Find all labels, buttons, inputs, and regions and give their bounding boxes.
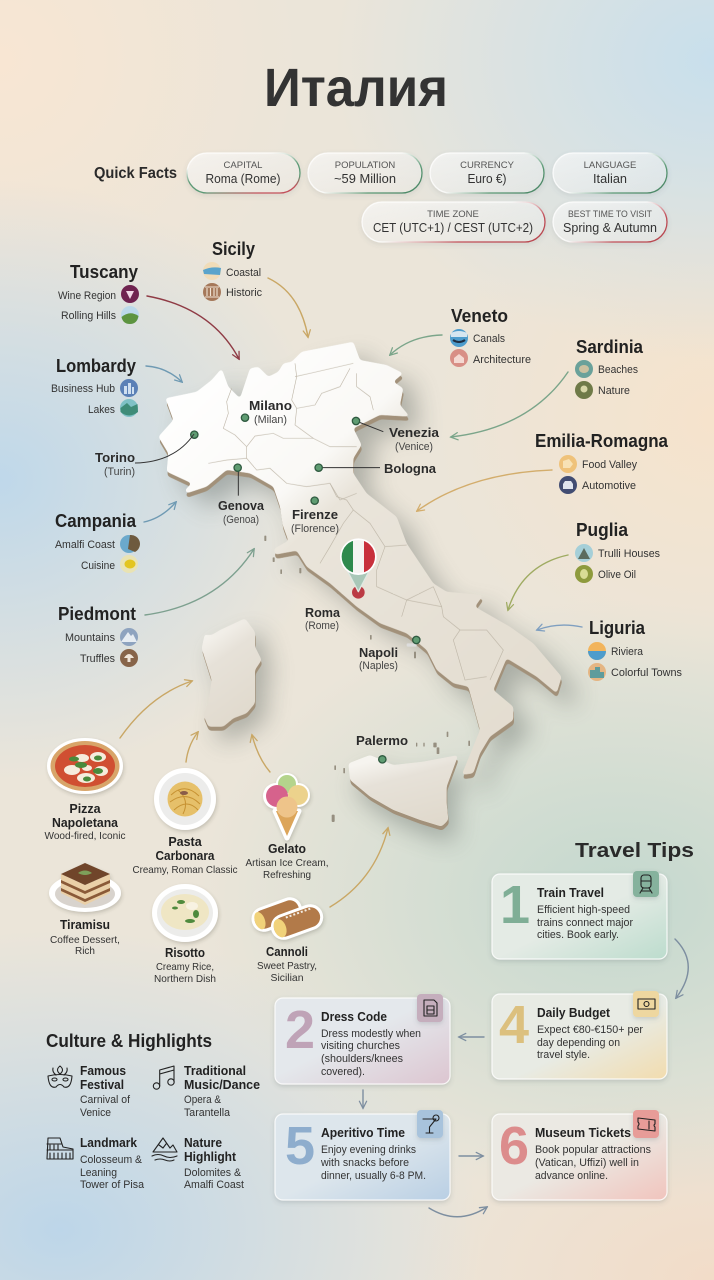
arrow: Veneto — [390, 335, 442, 355]
card: museum tickets: Museum Tickets — [535, 1126, 631, 1140]
item: traditional music — [153, 1064, 260, 1119]
icon: colorful towns — [588, 663, 606, 681]
region: Veneto: Veneto — [451, 306, 508, 326]
region: Campania: Amalfi Coast — [55, 539, 115, 551]
food: cannoli: Sweet Pastry, — [257, 960, 317, 972]
card: museum tickets — [492, 1110, 667, 1200]
region: Sicily: Sicily — [212, 239, 255, 259]
icon: lake — [120, 399, 138, 417]
region: Piedmont: Truffles — [80, 653, 115, 665]
city: Napoli: (Naples) — [359, 660, 398, 672]
item: traditional music: Opera & — [184, 1094, 222, 1106]
city dots — [191, 414, 420, 763]
item: landmark — [47, 1136, 145, 1191]
title: Италия — [264, 58, 448, 118]
region: Veneto — [450, 306, 531, 367]
card: daily budget: Daily Budget — [537, 1006, 611, 1020]
fact: time zone — [362, 202, 545, 242]
item: landmark: Leaning — [80, 1167, 117, 1179]
Sardinia — [202, 618, 262, 731]
region: Lombardy: Lombardy — [56, 356, 136, 376]
city: Roma — [305, 605, 341, 632]
card: aperitivo time: dinner, usually 6-8 PM. — [321, 1170, 426, 1182]
card: train travel: cities. Book early. — [537, 929, 619, 941]
arrow: Puglia — [508, 555, 568, 610]
region: Tuscany: Tuscany — [70, 262, 138, 282]
icon: riviera — [588, 642, 606, 660]
city: Genova: Genova — [218, 498, 265, 513]
city: Venezia: Venezia — [389, 425, 440, 440]
icon: mountains and waves — [152, 1138, 177, 1161]
city: Milano: Milano — [249, 398, 292, 413]
card: dress code: Dress Code — [321, 1010, 387, 1024]
city: Firenze — [291, 507, 339, 535]
quick facts heading: Quick Facts — [94, 165, 177, 182]
fact: language — [553, 153, 667, 193]
region: Puglia: Olive Oil — [598, 569, 636, 581]
region: Emilia-Romagna: Automotive — [582, 480, 636, 492]
Sicily — [348, 755, 459, 831]
region: Emilia-Romagna: Food Valley — [582, 459, 637, 471]
card: daily budget — [492, 991, 667, 1079]
item: famous festival — [48, 1064, 131, 1119]
arrow: Lombardy — [146, 366, 182, 382]
food arrows — [120, 681, 388, 907]
arrow: Tuscany — [147, 296, 239, 359]
fact: capital — [187, 153, 300, 193]
card: museum tickets: Book popular attractions — [535, 1144, 651, 1156]
food: pizza: Napoletana — [52, 816, 119, 830]
region: Sicily — [203, 239, 262, 301]
fact: language: LANGUAGE — [584, 160, 636, 171]
card: aperitivo time: Aperitivo Time — [321, 1126, 405, 1140]
city: Venezia — [389, 425, 440, 453]
region: Campania: Campania — [55, 511, 137, 531]
icon: pizza — [47, 738, 123, 794]
card: train travel: Train Travel — [537, 886, 604, 900]
card: train travel — [492, 871, 667, 959]
food: pizza: Pizza — [69, 802, 102, 816]
region: Tuscany — [58, 262, 139, 324]
city: Napoli: Napoli — [359, 645, 398, 660]
city: Roma: Roma — [305, 605, 341, 620]
food: tiramisu: Rich — [75, 945, 95, 957]
mainland — [158, 342, 562, 779]
card: daily budget: travel style. — [537, 1049, 590, 1061]
city: Firenze: Firenze — [292, 507, 338, 522]
fact: currency: Euro €) — [468, 171, 506, 186]
small islands — [264, 536, 470, 822]
icon: risotto plate — [152, 884, 218, 942]
card: dress code: visiting churches — [321, 1040, 400, 1052]
icon: music notes — [153, 1066, 174, 1089]
item: nature highlight: Nature — [184, 1136, 222, 1150]
item: nature highlight — [152, 1136, 244, 1191]
region: Tuscany: Rolling Hills — [61, 310, 116, 322]
quick facts panel — [94, 153, 667, 242]
card: daily budget: Expect €80-€150+ per — [537, 1024, 643, 1036]
icon: mountains — [120, 628, 138, 646]
region: Lombardy — [51, 356, 138, 417]
icon: city buildings — [120, 379, 138, 397]
region: Tuscany: Wine Region — [58, 290, 116, 302]
icon: architecture — [450, 349, 468, 367]
item: landmark: Colosseum & — [80, 1154, 143, 1166]
city: Milano: (Milan) — [254, 414, 287, 426]
fact: population: ~59 Million — [334, 171, 396, 186]
icon: carnival mask — [48, 1066, 72, 1087]
icon: food valley — [559, 455, 577, 473]
food: gelato: Artisan Ice Cream, — [246, 857, 328, 869]
region: Campania: Cuisine — [81, 560, 115, 572]
card: train travel: trains connect major — [537, 917, 633, 929]
region: Lombardy: Business Hub — [51, 383, 115, 395]
region: Piedmont: Mountains — [65, 632, 115, 644]
region: Sardinia: Nature — [598, 385, 630, 397]
region: Puglia: Trulli Houses — [598, 548, 660, 560]
icon: grapes — [121, 285, 139, 303]
city: Genova — [218, 498, 265, 526]
food: gelato: Refreshing — [263, 869, 311, 881]
card: museum tickets: (Vatican, Uffizi) well in — [535, 1157, 639, 1169]
icon: rolling hills — [121, 306, 139, 324]
food: tiramisu — [49, 863, 121, 957]
capital pin with Italian flag — [340, 538, 377, 599]
region: Puglia — [575, 520, 660, 583]
city: Milano — [249, 398, 292, 426]
region: Sicily: Coastal — [226, 267, 261, 279]
region: Sicily: Historic — [226, 287, 262, 299]
food: risotto — [152, 884, 218, 985]
food: risotto: Risotto — [165, 946, 205, 960]
fact: population — [308, 153, 422, 193]
city: Palermo: Palermo — [356, 733, 408, 748]
culture heading: Culture & Highlights — [46, 1031, 212, 1051]
map of Italy — [158, 342, 577, 842]
city: Torino: (Turin) — [104, 466, 135, 478]
fact: population: POPULATION — [335, 160, 395, 171]
region: Liguria — [588, 618, 682, 681]
region: Sardinia: Sardinia — [576, 337, 644, 357]
icon: trulli — [575, 544, 593, 562]
city: Roma: (Rome) — [305, 620, 339, 632]
tip arrows — [363, 939, 688, 1217]
food: pasta: Pasta — [168, 835, 203, 849]
card: aperitivo time: with snacks before — [320, 1157, 409, 1169]
fact: capital: Roma (Rome) — [206, 171, 280, 186]
icon: colosseum — [47, 1138, 73, 1159]
fact: currency — [430, 153, 544, 193]
card: museum tickets: advance online. — [535, 1170, 608, 1182]
icon: banknote — [633, 991, 659, 1017]
food: pizza — [44, 738, 126, 842]
icon: cocktail — [417, 1110, 443, 1138]
food: gelato: Gelato — [268, 842, 306, 856]
fact: currency: CURRENCY — [460, 160, 515, 171]
map city labels — [95, 398, 440, 748]
item: famous festival: Festival — [80, 1078, 124, 1092]
icon: tiramisu — [49, 863, 121, 912]
arrow: Liguria — [537, 625, 582, 630]
connector: Torino — [135, 434, 194, 463]
icon: truffle — [120, 649, 138, 667]
icon: amalfi coast — [120, 535, 140, 553]
food: tiramisu: Tiramisu — [60, 918, 110, 932]
city: Firenze: (Florence) — [291, 523, 339, 535]
leader lines — [238, 421, 383, 496]
card: aperitivo time: Enjoy evening drinks — [321, 1144, 416, 1156]
item: famous festival: Venice — [80, 1107, 111, 1119]
city: Venezia: (Venice) — [395, 441, 433, 453]
icon: dress code document — [417, 994, 443, 1022]
food: tiramisu: Coffee Dessert, — [50, 934, 120, 946]
food: risotto: Creamy Rice, — [156, 961, 214, 973]
item: nature highlight: Amalfi Coast — [184, 1179, 244, 1191]
number 2: 2 — [285, 1000, 315, 1060]
item: nature highlight: Dolomites & — [184, 1167, 242, 1179]
arrow: Sardinia — [451, 372, 568, 437]
region: Liguria: Riviera — [611, 646, 644, 658]
food: cannoli: Cannoli — [266, 945, 308, 959]
food: pasta: Carbonara — [156, 849, 215, 863]
icon: gelato cone — [263, 773, 310, 838]
icon: ticket — [633, 1110, 659, 1138]
icon: nature — [575, 381, 593, 399]
region: Piedmont — [58, 604, 138, 667]
arrow: Piedmont — [145, 549, 254, 615]
icon: temple — [203, 283, 221, 301]
region: Emilia-Romagna: Emilia-Romagna — [535, 431, 669, 451]
food: risotto: Northern Dish — [154, 973, 216, 985]
city: Torino — [95, 450, 135, 478]
fact: language: Italian — [593, 171, 627, 186]
icon: coast — [203, 262, 221, 280]
number 6: 6 — [499, 1116, 529, 1176]
region: Lombardy: Lakes — [88, 404, 115, 416]
number 1: 1 — [500, 875, 530, 935]
city: Genova: (Genoa) — [223, 514, 259, 526]
region: Campania — [55, 511, 140, 573]
icon: cannoli — [248, 894, 327, 943]
card: train travel: Efficient high-speed — [537, 904, 630, 916]
icon: gondola — [450, 329, 468, 347]
city: Napoli — [359, 645, 398, 672]
fact: time zone: CET (UTC+1) / CEST (UTC+2) — [373, 220, 533, 235]
food: cannoli — [248, 894, 327, 984]
icon: pasta plate — [154, 768, 216, 830]
fact: best time to visit: BEST TIME TO VISIT — [568, 209, 652, 220]
icon: automotive — [559, 476, 577, 494]
number 5: 5 — [285, 1116, 315, 1176]
region: Piedmont: Piedmont — [58, 604, 136, 624]
item: traditional music: Traditional — [184, 1064, 246, 1078]
food: pasta — [132, 768, 238, 876]
number 4: 4 — [499, 995, 529, 1055]
card: daily budget: day depending on — [537, 1037, 620, 1049]
region: Puglia: Puglia — [576, 520, 629, 540]
arrow: Emilia-Romagna — [417, 470, 552, 511]
card: dress code — [275, 994, 450, 1084]
arrow: Campania — [144, 502, 176, 522]
region: Liguria: Colorful Towns — [611, 667, 682, 679]
region: Veneto: Architecture — [473, 354, 531, 366]
fact: capital: CAPITAL — [224, 160, 262, 171]
fact: best time to visit — [553, 202, 667, 242]
item: traditional music: Music/Dance — [184, 1078, 260, 1092]
card: dress code: (shoulders/knees — [321, 1053, 403, 1065]
food: gelato — [246, 773, 328, 881]
region: Veneto: Canals — [473, 333, 505, 345]
icon: lemon — [120, 555, 138, 573]
item: famous festival: Famous — [80, 1064, 126, 1078]
item: nature highlight: Highlight — [184, 1150, 237, 1164]
fact: best time to visit: Spring & Autumn — [563, 220, 657, 235]
item: traditional music: Tarantella — [184, 1107, 231, 1119]
arrow: Sicily — [268, 278, 308, 337]
food: pasta: Creamy, Roman Classic — [132, 864, 238, 876]
card: dress code: Dress modestly when — [321, 1028, 421, 1040]
city: Bologna: Bologna — [384, 461, 437, 476]
region: Emilia-Romagna — [535, 431, 669, 494]
icon: olive — [575, 565, 593, 583]
travel tips heading: Travel Tips — [575, 840, 694, 862]
icon: train — [633, 871, 659, 897]
item: famous festival: Carnival of — [80, 1094, 131, 1106]
item: landmark: Tower of Pisa — [80, 1179, 145, 1191]
region: Sardinia — [575, 337, 644, 399]
fact: time zone: TIME ZONE — [427, 209, 479, 220]
icon: beach — [575, 360, 593, 378]
card: dress code: covered). — [321, 1066, 365, 1078]
city: Torino: Torino — [95, 450, 135, 465]
card: aperitivo time — [275, 1110, 450, 1200]
food: cannoli: Sicilian — [270, 972, 304, 984]
region: Liguria: Liguria — [589, 618, 646, 638]
item: landmark: Landmark — [80, 1136, 137, 1150]
food: pizza: Wood-fired, Iconic — [44, 830, 126, 842]
region: Sardinia: Beaches — [598, 364, 638, 376]
culture and highlights panel — [46, 1031, 260, 1191]
